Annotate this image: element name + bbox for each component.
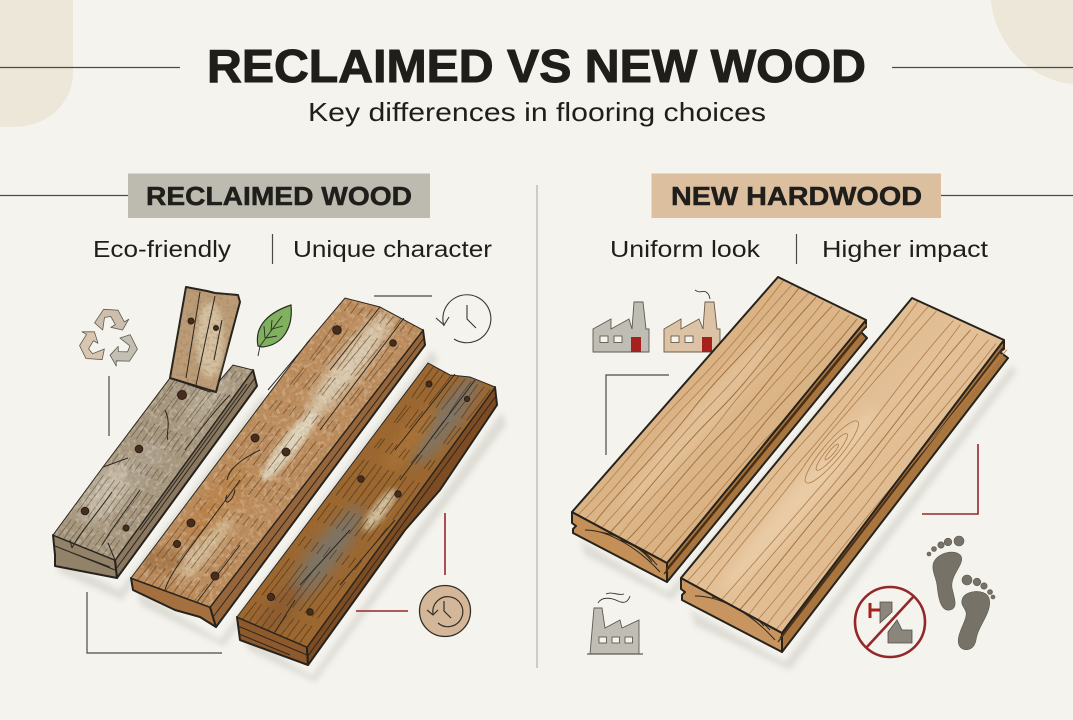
header rule: reclaimed	[0, 194, 128, 196]
icon: recycle arrows	[73, 309, 142, 371]
icon: clock badge	[420, 586, 470, 636]
badge: new hardwood: NEW HARDWOOD	[671, 181, 922, 211]
plank: new hardwood left	[572, 277, 867, 582]
icon: footprints	[927, 536, 995, 650]
connector: bottom left bracket	[87, 592, 222, 653]
icon: factory bottom	[587, 593, 643, 654]
icon: clock outline	[436, 295, 491, 343]
icon: leaf	[257, 305, 291, 356]
corner shape: top left	[0, 0, 73, 127]
plank: dark rusty	[234, 360, 498, 665]
title: RECLAIMED VS NEW WOOD	[207, 40, 866, 92]
plank: new hardwood right	[681, 298, 1008, 652]
corner shape: top right	[991, 0, 1073, 84]
label: eco-friendly: Eco-friendly	[93, 236, 232, 262]
badge: new hardwood	[652, 174, 941, 218]
header rule: new hardwood	[941, 194, 1073, 196]
icon: factory tan	[664, 290, 720, 352]
subtitle: Key differences in flooring choices	[308, 97, 766, 127]
badge: reclaimed wood: RECLAIMED WOOD	[146, 181, 412, 211]
icon: no tongue and groove	[855, 587, 925, 657]
center divider	[536, 185, 538, 668]
connector: clock top	[374, 295, 432, 297]
connector: red bracket	[922, 444, 978, 514]
plank: grey weathered	[50, 347, 257, 578]
label: uniform look: Uniform look	[610, 236, 761, 262]
connector: red horizontal	[356, 610, 408, 612]
label: higher impact: Higher impact	[822, 236, 989, 262]
icon: factory grey	[593, 302, 649, 352]
label: unique character: Unique character	[293, 236, 492, 262]
badge: reclaimed wood	[128, 174, 430, 218]
plank: tan weathered	[128, 295, 426, 627]
connector: red vertical	[444, 513, 446, 575]
shadows under new planks	[580, 345, 1016, 670]
connector: recycle	[108, 376, 110, 436]
panel: new hardwood	[572, 174, 1073, 670]
title rules	[0, 66, 1073, 68]
connector: left bracket	[606, 375, 669, 455]
panel: reclaimed wood	[0, 174, 506, 682]
plank: broken upright fragment	[168, 285, 242, 395]
shadows under reclaimed planks	[58, 350, 506, 682]
